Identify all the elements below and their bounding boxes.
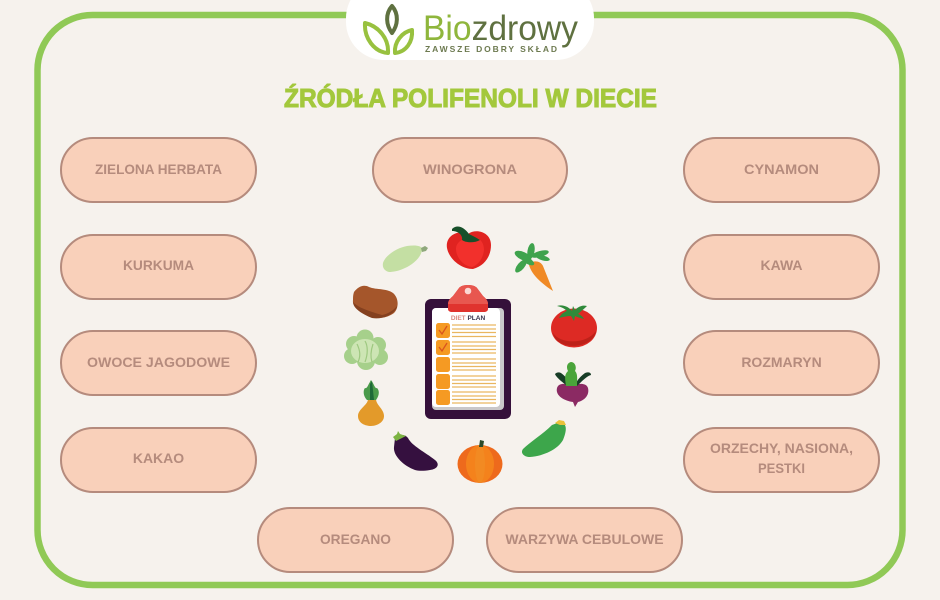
pill: cynamon: CYNAMON xyxy=(744,161,819,177)
icon: cucumber xyxy=(522,420,566,457)
pill: orzechy, nasiona, pestki xyxy=(684,428,879,492)
pill: owoce jagodowe xyxy=(61,331,256,395)
pill: kawa xyxy=(684,235,879,299)
checklist lines xyxy=(452,325,496,403)
pill: zielona herbata xyxy=(61,138,256,202)
pill: orzechy, nasiona, pestki: ORZECHY, NASIONA, xyxy=(710,440,853,456)
icon: cabbage xyxy=(344,330,388,370)
pill: orzechy, nasiona, pestki: PESTKI xyxy=(758,460,805,476)
icon: pumpkin xyxy=(458,440,502,483)
icon: tomato xyxy=(551,305,597,348)
pill: oregano xyxy=(258,508,453,572)
icon: onion xyxy=(358,380,384,426)
icon: bell pepper xyxy=(447,227,491,269)
checklist boxes xyxy=(436,323,450,405)
logo wordmark: Biozdrowy xyxy=(423,9,578,48)
pill: owoce jagodowe: OWOCE JAGODOWE xyxy=(87,354,230,370)
clipboard board xyxy=(425,299,511,419)
logo tagline: ZAWSZE DOBRY SKŁAD xyxy=(425,44,557,54)
logo white badge xyxy=(346,0,594,60)
pill: rozmaryn xyxy=(684,331,879,395)
pill: kurkuma xyxy=(61,235,256,299)
icon: zucchini xyxy=(383,245,428,272)
pill: kawa: KAWA xyxy=(760,257,802,273)
pill: oregano: OREGANO xyxy=(320,531,391,547)
logo: Biozdrowy xyxy=(346,0,594,60)
pill: rozmaryn: ROZMARYN xyxy=(741,354,822,370)
clipboard: diet plan xyxy=(425,285,511,419)
clipboard paper xyxy=(432,308,504,410)
title: ŹRÓDŁA POLIFENOLI W DIECIE xyxy=(284,83,657,113)
pill: warzywa cebulowe: WARZYWA CEBULOWE xyxy=(505,531,664,547)
clipboard clip xyxy=(448,285,488,312)
pill: cynamon xyxy=(684,138,879,202)
icon: eggplant xyxy=(393,431,438,471)
pill: zielona herbata: ZIELONA HERBATA xyxy=(95,161,222,177)
pill: winogrona xyxy=(373,138,567,202)
pill: kurkuma: KURKUMA xyxy=(123,257,194,273)
icon: potato xyxy=(353,286,398,318)
logo leaves icon xyxy=(365,6,412,53)
pill: kakao xyxy=(61,428,256,492)
pill: kakao: KAKAO xyxy=(133,450,184,466)
icon: beetroot xyxy=(555,362,591,407)
clipboard heading: DIET PLAN xyxy=(451,315,485,322)
pill: winogrona: WINOGRONA xyxy=(423,161,517,177)
icon: carrot xyxy=(513,243,553,291)
pill: warzywa cebulowe xyxy=(487,508,682,572)
